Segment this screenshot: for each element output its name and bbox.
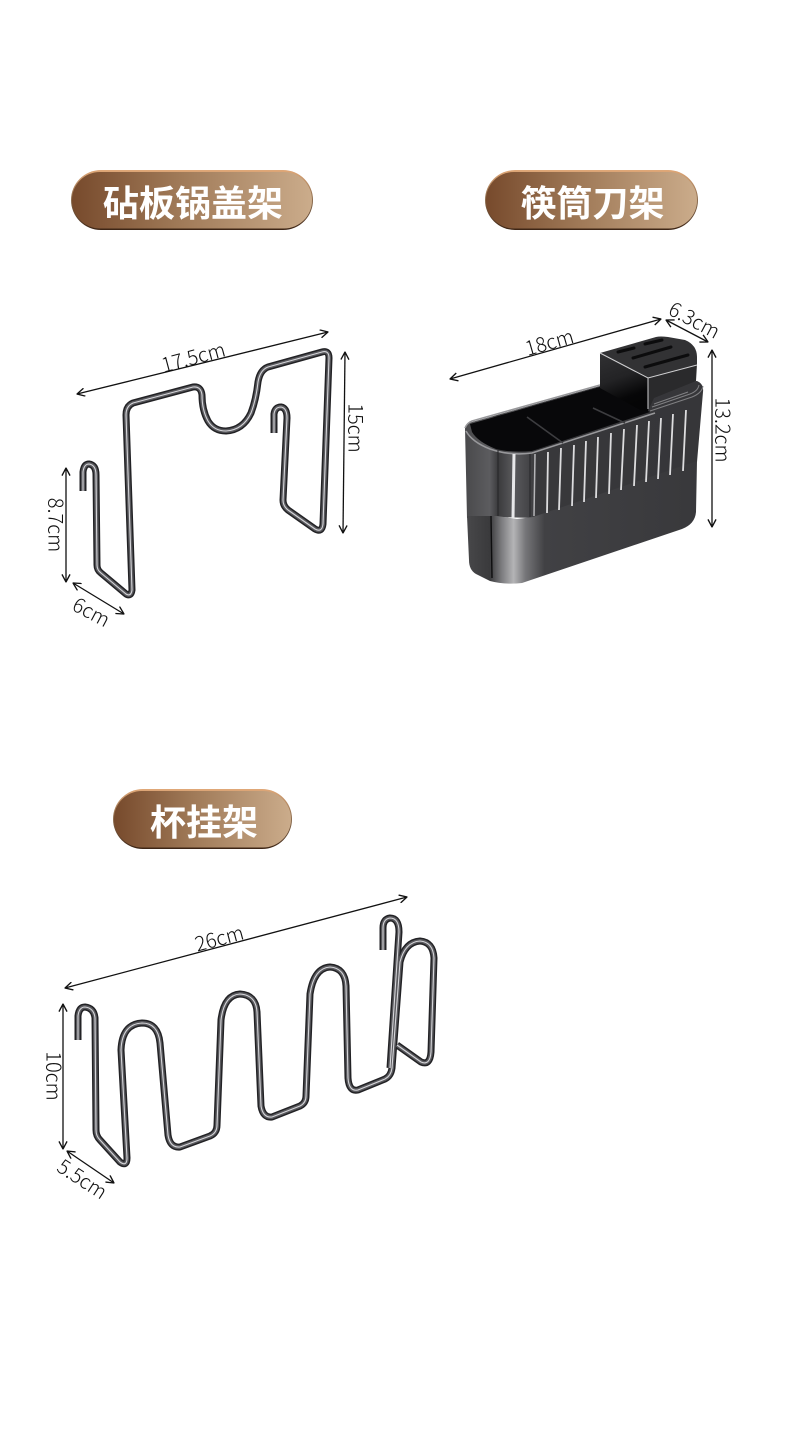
dimension: 17.5cm: 17.5cm bbox=[158, 334, 228, 378]
dimension: 5.5cm: 5.5cm bbox=[52, 1151, 114, 1205]
dimension: 6cm: 6cm bbox=[68, 589, 116, 633]
dimension: 26cm: 26cm bbox=[191, 917, 247, 957]
knife block right face bbox=[648, 364, 697, 411]
dimension: 17.5cm bbox=[77, 332, 328, 394]
inner opening bbox=[470, 387, 650, 452]
dimension: 18cm bbox=[450, 319, 661, 379]
rim highlight bbox=[465, 385, 655, 454]
dimension: 8.7cm: 8.7cm bbox=[42, 498, 72, 552]
knife slots bbox=[618, 340, 688, 367]
dimension: 13.2cm: 13.2cm bbox=[710, 397, 738, 463]
dimension: 6.3cm: 6.3cm bbox=[664, 293, 726, 345]
holder upper ribbed body bbox=[465, 381, 703, 518]
knife block top face bbox=[600, 336, 697, 378]
dimension: 15cm: 15cm bbox=[342, 403, 372, 453]
dividers bbox=[527, 408, 625, 443]
product: cutting board and pot lid rack bbox=[83, 352, 329, 595]
dimension: 8.7cm bbox=[42, 468, 72, 582]
holder lower body bbox=[467, 461, 697, 584]
pill heading: 筷筒刀架: 筷筒刀架 bbox=[520, 183, 665, 224]
pill heading: 杯挂架: 杯挂架 bbox=[150, 802, 258, 843]
dimension: 10cm: 10cm bbox=[40, 1051, 70, 1101]
product: cup hanger rack bbox=[78, 918, 434, 1164]
pill heading: 杯挂架 bbox=[113, 789, 292, 849]
pill heading: 砧板锅盖架 bbox=[71, 170, 313, 230]
rim ledges bbox=[650, 385, 703, 411]
knife block left face bbox=[600, 353, 648, 411]
pill heading: 筷筒刀架 bbox=[485, 170, 698, 230]
product: chopstick and knife holder bbox=[465, 336, 703, 584]
dimension: 18cm: 18cm bbox=[521, 320, 577, 362]
pill heading: 砧板锅盖架: 砧板锅盖架 bbox=[103, 183, 283, 224]
ribs bbox=[547, 410, 686, 513]
dimension: 26cm bbox=[65, 897, 407, 988]
